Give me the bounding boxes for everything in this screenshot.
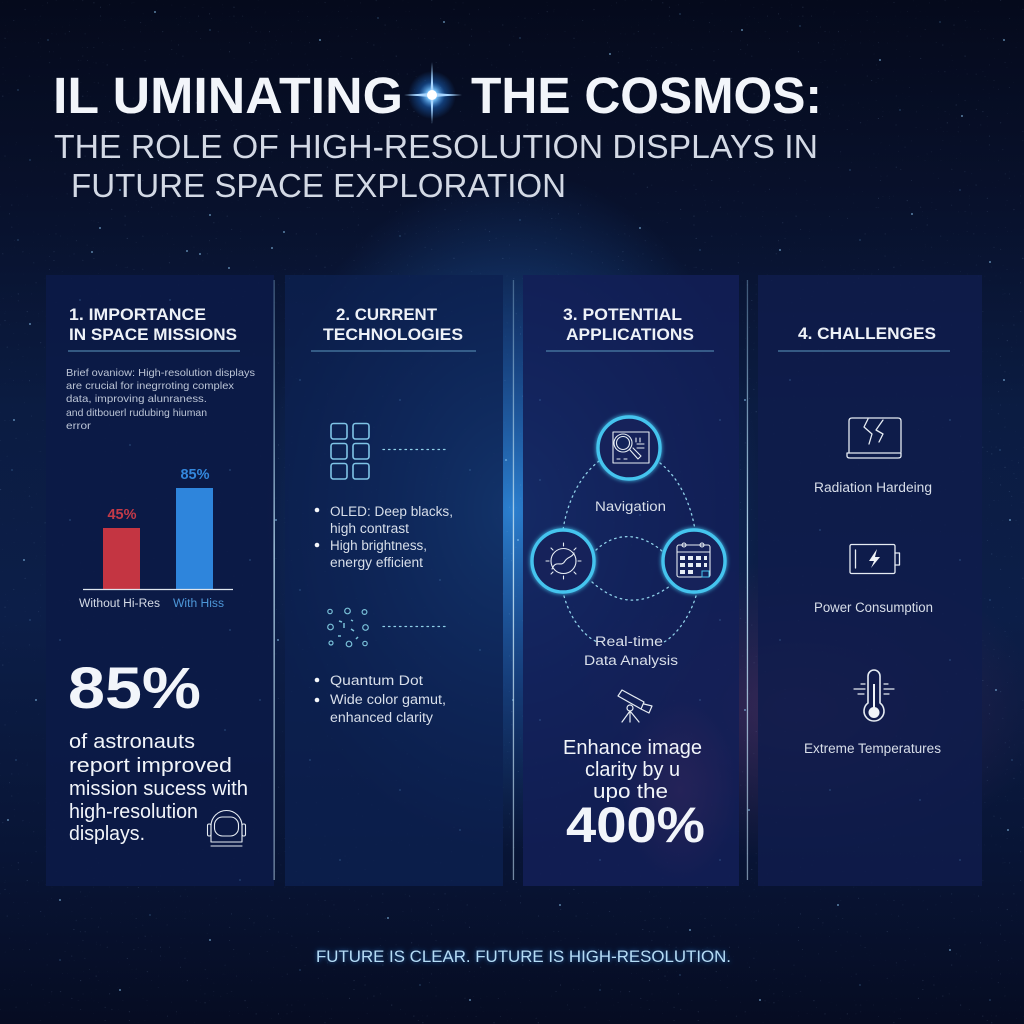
bar chart: 85% bbox=[180, 467, 210, 483]
OLED bullet list: OLED: Deep blacks, bbox=[330, 504, 453, 519]
OLED bullet list: high contrast bbox=[330, 521, 409, 536]
section 3 heading bbox=[546, 305, 714, 351]
overview text: and ditbouerl rudubing hiuman bbox=[66, 407, 207, 419]
footer tagline: FUTURE IS CLEAR. FUTURE IS HIGH-RESOLUTION. bbox=[316, 948, 731, 966]
bar chart: Without Hi-Res bbox=[79, 598, 160, 610]
astronaut statement: mission sucess with bbox=[69, 778, 248, 800]
astronaut statement bbox=[69, 731, 248, 845]
label: power consumption: Power Consumption bbox=[814, 600, 933, 615]
icon: telescope bbox=[618, 690, 652, 722]
image clarity statement: clarity by u bbox=[585, 759, 680, 781]
overview text bbox=[66, 367, 255, 432]
astronaut statement: displays. bbox=[69, 823, 145, 845]
section 1 heading bbox=[68, 305, 240, 351]
astronaut statement: high-resolution bbox=[69, 801, 198, 823]
bar chart: With Hiss bbox=[173, 598, 224, 610]
image clarity statement bbox=[563, 737, 702, 803]
label: real-time data analysis: Data Analysis bbox=[584, 653, 678, 668]
OLED bullet list: High brightness, bbox=[330, 538, 427, 553]
icon: OLED pixel grid bbox=[331, 424, 369, 479]
quantum dot bullet list: Wide color gamut, bbox=[330, 692, 446, 707]
dotted connector quantum bbox=[383, 626, 445, 628]
title bbox=[53, 67, 822, 124]
section 1 heading: 1. IMPORTANCE bbox=[69, 305, 206, 324]
overview text: data, improving alunraness. bbox=[66, 393, 207, 405]
bar chart: 45% bbox=[107, 507, 137, 523]
section 2 heading: TECHNOLOGIES bbox=[323, 325, 463, 344]
ring icon: navigation search bbox=[598, 417, 660, 479]
icon: star flare bbox=[404, 62, 462, 124]
OLED bullet list bbox=[315, 504, 453, 570]
quantum dot bullet list: Quantum Dot bbox=[330, 673, 423, 688]
big stat 85%: 85% bbox=[68, 656, 201, 721]
overview text: error bbox=[66, 420, 92, 432]
icon: cracked laptop bbox=[847, 418, 901, 458]
image clarity statement: Enhance image bbox=[563, 737, 702, 759]
panel: applications background bbox=[523, 275, 739, 886]
image clarity statement: upo the bbox=[593, 781, 668, 803]
label: navigation: Navigation bbox=[595, 499, 666, 514]
panel: technologies background bbox=[285, 275, 503, 886]
title: THE COSMOS: bbox=[471, 67, 822, 124]
icon: quantum dots bbox=[328, 608, 368, 647]
panel tint: purple haze in applications bbox=[622, 700, 738, 880]
section 2 heading bbox=[311, 305, 476, 351]
astronaut statement: report improved bbox=[69, 755, 232, 777]
quantum dot bullet list: enhanced clarity bbox=[330, 710, 433, 725]
big stat 400%: 400% bbox=[566, 797, 705, 853]
dotted orbit diagram bbox=[563, 461, 696, 642]
section 1 heading: IN SPACE MISSIONS bbox=[69, 325, 237, 344]
quantum dot bullet list bbox=[315, 673, 446, 725]
subtitle bbox=[54, 128, 818, 204]
label: radiation hardening: Radiation Hardeing bbox=[814, 480, 932, 495]
astronaut statement: of astronauts bbox=[69, 731, 195, 753]
dotted connector OLED bbox=[383, 448, 449, 450]
icon: thermometer bbox=[854, 670, 894, 721]
subtitle: FUTURE SPACE EXPLORATION bbox=[71, 167, 566, 204]
section 4 heading: 4. CHALLENGES bbox=[798, 324, 936, 343]
panel divider lines bbox=[274, 280, 748, 880]
ring icon: satellite data orbit bbox=[532, 530, 594, 592]
OLED bullet list: energy efficient bbox=[330, 555, 423, 570]
section 2 heading: 2. CURRENT bbox=[336, 305, 438, 324]
title: IL UMINATING bbox=[53, 67, 403, 124]
panel: challenges background bbox=[758, 275, 982, 886]
subtitle: THE ROLE OF HIGH-RESOLUTION DISPLAYS IN bbox=[54, 128, 818, 165]
overview text: are crucial for inegrroting complex bbox=[66, 380, 235, 392]
section 3 heading: APPLICATIONS bbox=[566, 325, 694, 344]
label: extreme temperatures: Extreme Temperatures bbox=[804, 741, 941, 756]
section 3 heading: 3. POTENTIAL bbox=[563, 305, 682, 324]
label: real-time data analysis bbox=[584, 634, 678, 668]
label: real-time data analysis: Real-time bbox=[595, 634, 663, 649]
icon: battery bbox=[850, 544, 900, 574]
bar chart bbox=[79, 467, 233, 610]
panel: importance background bbox=[46, 275, 274, 886]
icon: astronaut helmet bbox=[208, 810, 246, 846]
overview text: Brief ovaniow: High-resolution displays bbox=[66, 367, 255, 379]
ring icon: calendar data bbox=[663, 530, 725, 592]
